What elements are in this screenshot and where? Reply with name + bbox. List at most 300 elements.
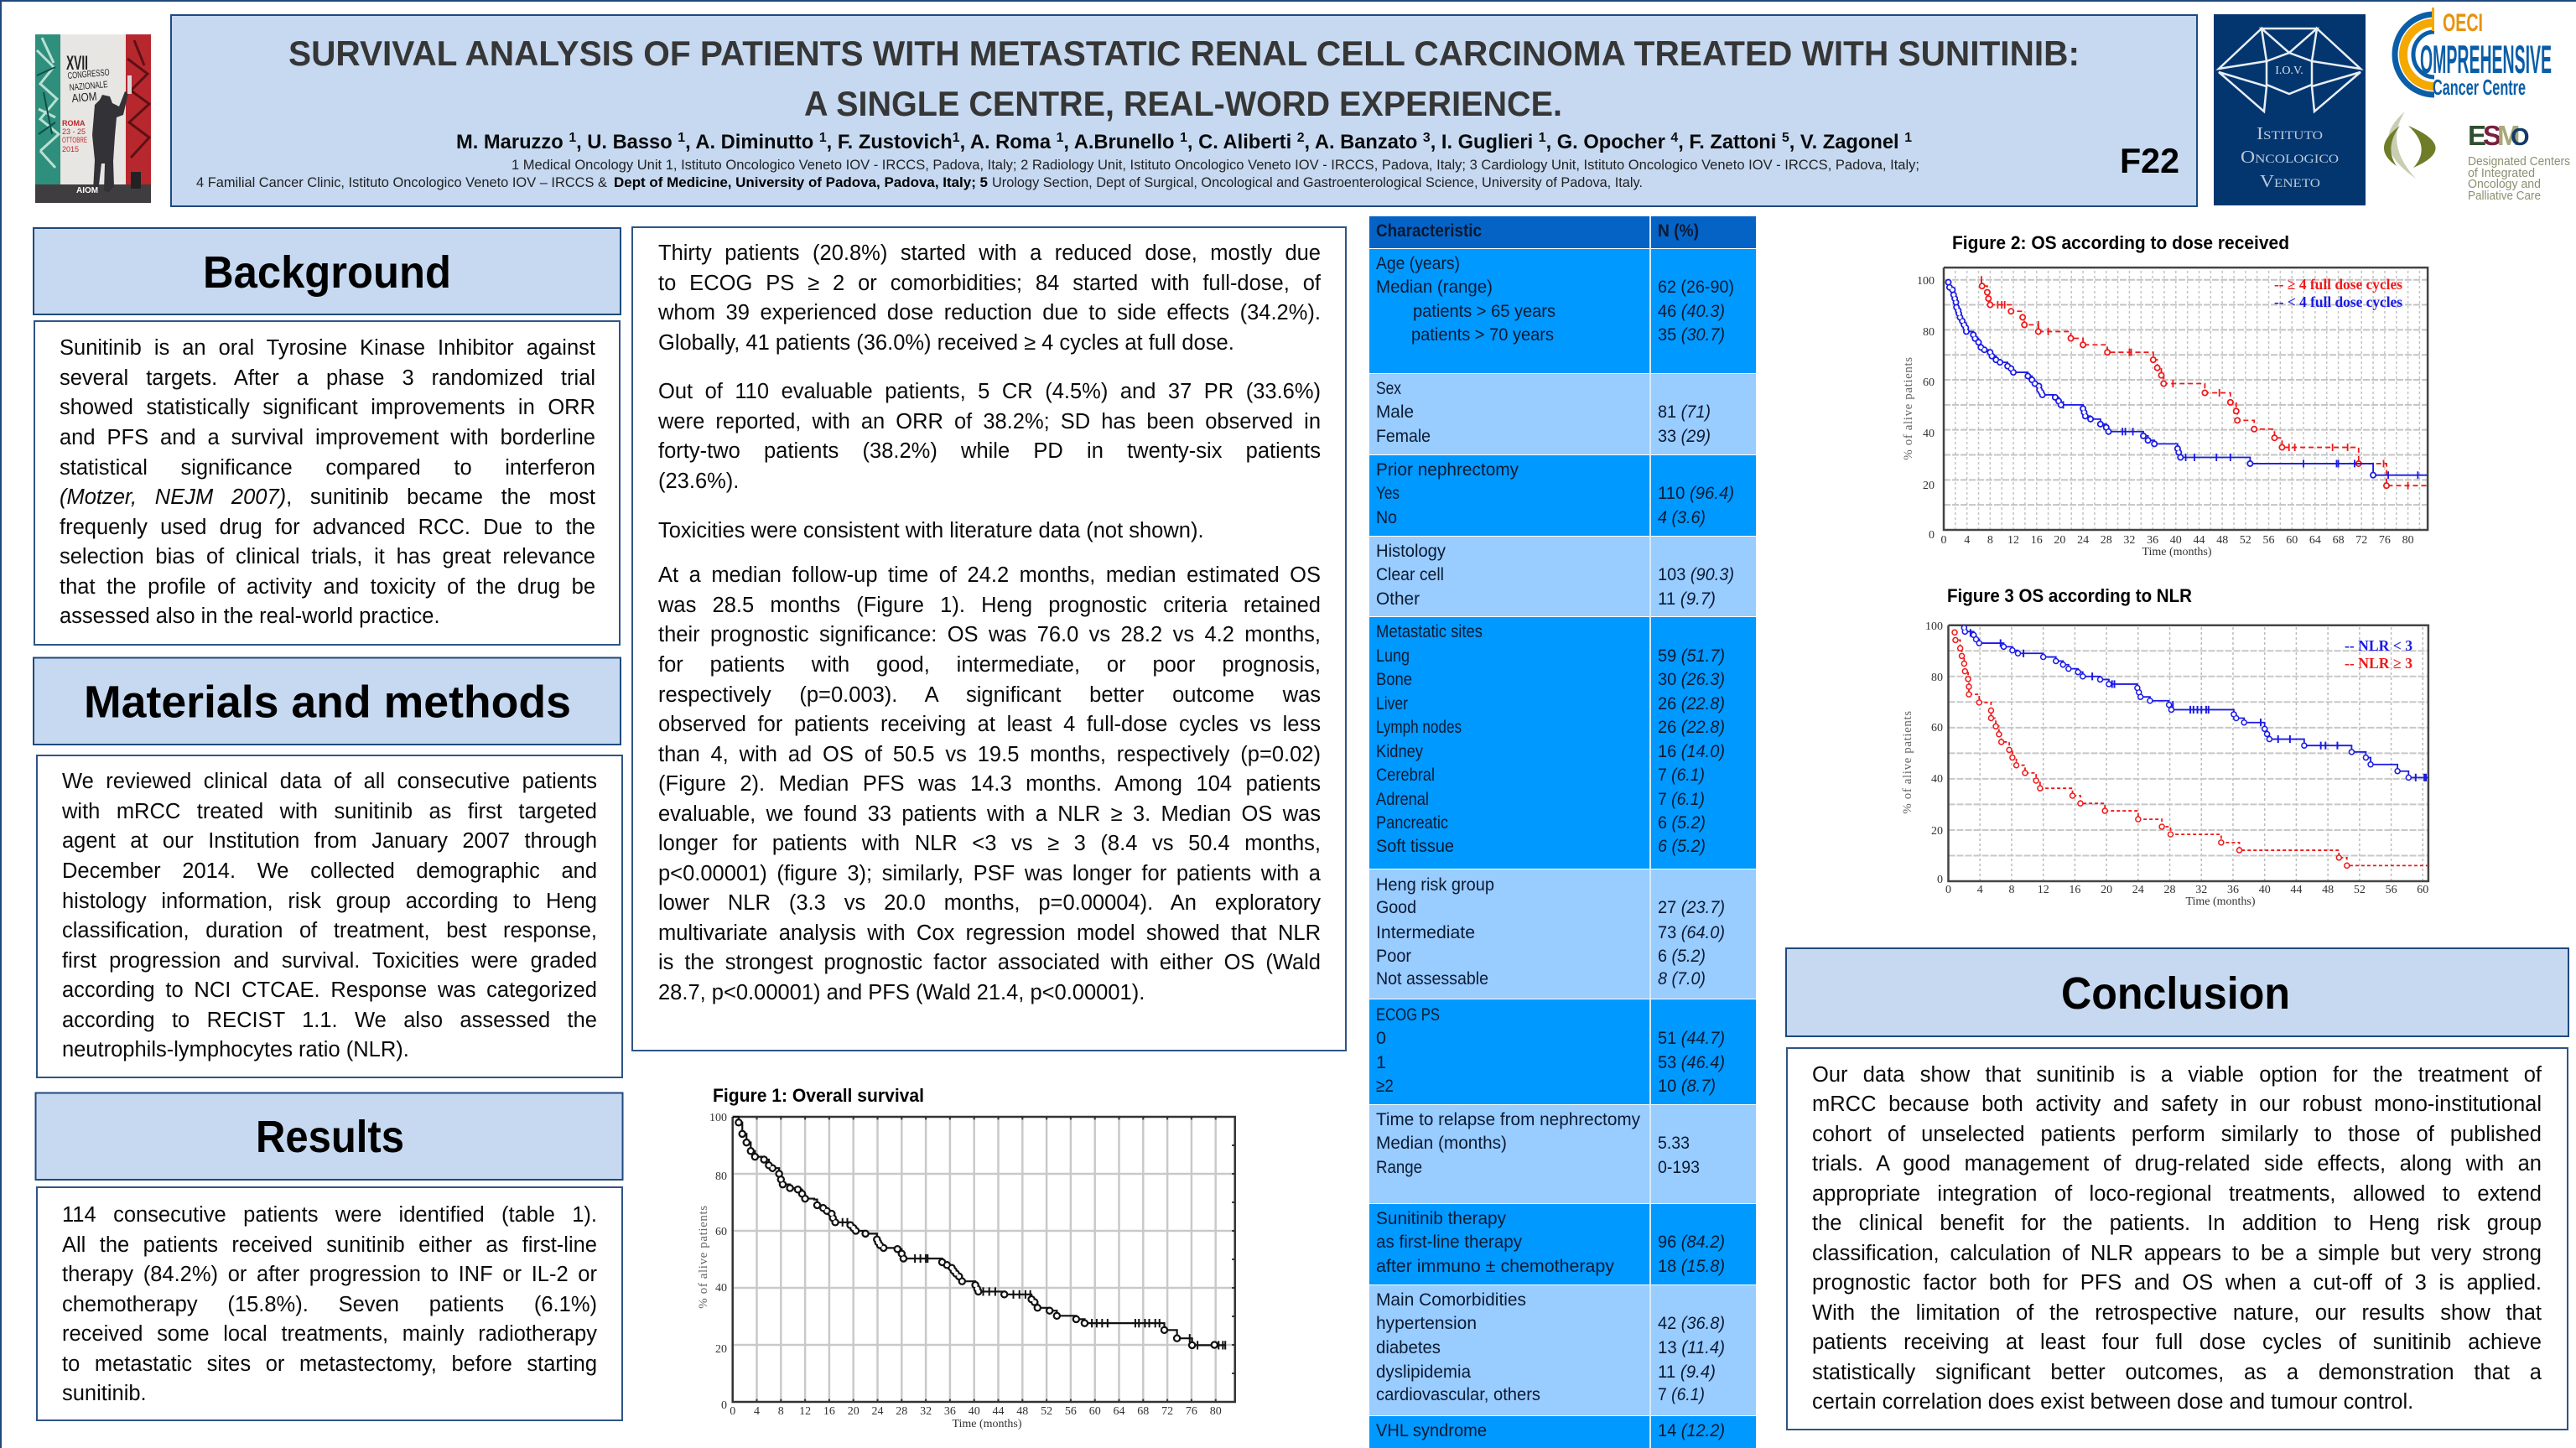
- row: metastatic sites: Lung: [1376, 646, 1410, 666]
- y axis labels: 80: [715, 1170, 727, 1183]
- row: histology: 11 (9.7): [1658, 589, 1716, 609]
- x axis labels: 24: [872, 1405, 884, 1418]
- row: time to relapse: Median (months): [1376, 1133, 1507, 1153]
- x axis labels: 56: [1065, 1405, 1077, 1418]
- row: main comorbidities: cardiovascular, others: [1376, 1384, 1540, 1404]
- affiliations line 1: 1 Medical Oncology Unit 1, Istituto Oncologico Veneto IOV - IRCCS, Padova, Italy; 2 Radiology Unit, Istituto Oncologico Veneto IOV - IRCCS, Padova, Italy; 3 Cardiology Unit, Istituto Oncologico Veneto IOV - IRCCS, Padova, Italy;: [512, 157, 1919, 173]
- panel: materials and methods text: classification, duration of treatment, best response,: [62, 919, 597, 942]
- panel: conclusion text: appropriate integration of loco-regional treatments, allowed to extend: [1812, 1182, 2542, 1206]
- row: sex: Sex: [1376, 378, 1401, 398]
- panel: conclusion text: mRCC because both activity and safety in our robust mono-institutional: [1812, 1092, 2542, 1116]
- paragraph: survival: observed for patients receiving at least 4 full-dose cycles vs less: [658, 713, 1321, 736]
- row: time to relapse: Time to relapse from nephrectomy: [1376, 1109, 1640, 1129]
- x axis labels: 44: [2290, 884, 2302, 896]
- row: ECOG PS: 51 (44.7): [1658, 1028, 1725, 1048]
- blue event markers: [1949, 283, 2373, 475]
- row: Heng risk group: Poor: [1376, 946, 1411, 966]
- legend: -- < 4 full dose cycles: [2274, 293, 2402, 310]
- x axis labels: 80: [2402, 534, 2414, 547]
- x axis labels: 48: [2322, 884, 2334, 896]
- row: metastatic sites: Lymph nodes: [1376, 717, 1462, 737]
- panel: conclusion text: With the limitation of the retrospective nature, our results show that: [1812, 1301, 2542, 1325]
- row: metastatic sites: 26 (22.8): [1658, 717, 1725, 737]
- x axis labels: 12: [2007, 534, 2019, 547]
- row: ECOG PS: 0: [1376, 1028, 1386, 1048]
- row: sex: Female: [1376, 426, 1431, 446]
- x axis labels: 16: [823, 1405, 835, 1418]
- row: histology: [1376, 541, 1734, 609]
- logo: Istituto Oncologico Veneto: Veneto: [2260, 171, 2320, 191]
- x axis labels: [1945, 884, 2428, 896]
- row: main comorbidities: dyslipidemia: [1376, 1362, 1471, 1382]
- row: Heng risk group: 73 (64.0): [1658, 922, 1725, 942]
- congress poster image: ROMA: [62, 119, 86, 127]
- row: prior nephrectomy: 4 (3.6): [1658, 507, 1706, 527]
- x axis labels: 4: [1977, 884, 1983, 896]
- x axis labels: 68: [2333, 534, 2345, 547]
- y axis title: % of alive patients: [697, 1205, 710, 1309]
- logo: ESMO designated centers: Palliative Care: [2468, 189, 2541, 203]
- panel: background text: and PFS and a survival improvement with borderline: [60, 426, 595, 449]
- x axis labels: 0: [730, 1405, 735, 1418]
- row: metastatic sites: Metastatic sites: [1376, 621, 1483, 641]
- logo: Istituto Oncologico Veneto: I.O.V.: [2275, 65, 2303, 77]
- row: ECOG PS: 53 (46.4): [1658, 1052, 1725, 1072]
- x axis labels: 72: [2355, 534, 2367, 547]
- panel: conclusion text: the clinical benefit for the patients. In addition to Heng risk group: [1812, 1212, 2542, 1235]
- y axis labels: 60: [1923, 376, 1935, 389]
- affiliations line 2: Dept of Medicine, University of Padova, Padova, Italy; 5: [614, 174, 988, 190]
- paragraph: survival: their prognostic significance: OS was 76.0 vs 28.2 vs 4.2 months,: [658, 623, 1321, 646]
- blue curve: fewer than 4 full dose cycles: [1949, 283, 2428, 475]
- row: time to relapse: 5.33: [1658, 1133, 1690, 1153]
- row: prior nephrectomy: No: [1376, 507, 1397, 527]
- x axis labels: 40: [2170, 534, 2182, 547]
- heading: Conclusion: Conclusion: [2061, 968, 2290, 1019]
- y axis labels: 40: [715, 1282, 727, 1295]
- paragraph: survival: multivariate analysis with Cox regression model showed that NLR: [658, 921, 1321, 945]
- affiliations line 2: Urology Section, Dept of Surgical, Oncological and Gastroenterological Science, University of Padova, Italy.: [992, 174, 1643, 190]
- logo: ESMO designated centers: O: [2511, 124, 2530, 151]
- figure 3 title: Figure 3 OS according to NLR: [1947, 585, 2192, 606]
- x axis labels: 20: [848, 1405, 860, 1418]
- panel: conclusion text: prognostic factor both for PFS and OS when a cut-off of 3 is applied.: [1812, 1271, 2542, 1295]
- x axis labels: 60: [1089, 1405, 1101, 1418]
- row: metastatic sites: 26 (22.8): [1658, 693, 1725, 714]
- logo: OECI Comprehensive Cancer Centre: OECI: [2443, 9, 2483, 37]
- x axis labels: 52: [2240, 534, 2251, 547]
- panel: materials and methods text: neutrophils-lymphocytes ratio (NLR).: [62, 1038, 409, 1061]
- row: Heng risk group: Good: [1376, 897, 1416, 917]
- panel: conclusion text: certain correlation does exist between dose and tumour control.: [1812, 1390, 2413, 1414]
- y axis labels: 0: [1929, 529, 1935, 542]
- paragraph: survival: [658, 563, 1321, 1004]
- x axis labels: 4: [1964, 534, 1970, 547]
- x axis labels: 24: [2132, 884, 2144, 896]
- y axis labels: [1925, 620, 1943, 886]
- y axis labels: 60: [1931, 722, 1943, 734]
- panel: results text: [35, 1186, 622, 1421]
- congress poster image: AIOM: [76, 186, 98, 195]
- row: metastatic sites: [1376, 621, 1725, 856]
- y axis labels: 20: [715, 1343, 727, 1356]
- blue curve: NLR below 3: [1964, 628, 2428, 777]
- authors: M. Maruzzo 1, U. Basso 1, A. Diminutto 1, F. Zustovich1, A. Roma 1, A.Brunello 1, C. Aliberti 2, A. Banzato 3, I. Guglieri 1, G. Opocher 4, F. Zattoni 5, V. Zagonel 1: [456, 131, 1912, 153]
- logo: ESMO designated centers: Oncology and: [2468, 177, 2541, 191]
- legend: -- NLR ≥ 3: [2345, 655, 2412, 672]
- paragraph: dose: Thirty patients (20.8%) started with a reduced dose, mostly due: [658, 241, 1321, 265]
- panel: materials and methods text: histology information, risk group according to Heng: [62, 890, 597, 913]
- row: metastatic sites: 6 (5.2): [1658, 836, 1706, 856]
- y axis labels: 100: [1925, 620, 1943, 633]
- paragraph: response: were reported, with an ORR of 38.2%; SD has been observed in: [658, 410, 1321, 433]
- y axis labels: 80: [1923, 326, 1935, 339]
- congress poster image: AIOM: [71, 89, 97, 105]
- x axis labels: 0: [1945, 884, 1951, 896]
- logo: Istituto Oncologico Veneto: Istituto: [2257, 123, 2323, 143]
- x axis labels: 0: [1940, 534, 1947, 547]
- y axis labels: 0: [721, 1399, 727, 1412]
- row: age: 35 (30.7): [1658, 324, 1725, 345]
- x axis labels: 36: [2147, 534, 2158, 547]
- paragraph: survival: was 28.5 months (Figure 1). Heng prognostic criteria retained: [658, 594, 1321, 617]
- poster code F22: F22: [2120, 141, 2179, 180]
- x axis labels: 64: [2309, 534, 2321, 547]
- heading: Results: Results: [256, 1112, 404, 1162]
- row: sunitinib therapy: Sunitinib therapy: [1376, 1208, 1506, 1228]
- panel: materials and methods text: December 2014. We collected demographic and: [62, 859, 597, 883]
- x axis labels: 52: [2354, 884, 2366, 896]
- paragraph: dose: to ECOG PS ≥ 2 or comorbidities; 84 started with full-dose, of: [658, 272, 1321, 295]
- y axis labels: [709, 1112, 727, 1412]
- panel: results continued: [631, 226, 1347, 1051]
- heading: Background: Background: [203, 247, 451, 298]
- table header: Characteristic: [1376, 221, 1482, 241]
- congress poster image: NAZIONALE: [69, 80, 108, 93]
- row: age: patients > 65 years: [1413, 301, 1555, 321]
- row: main comorbidities: diabetes: [1376, 1337, 1441, 1357]
- blue censor ticks: [2064, 401, 2418, 479]
- paragraph: dose: Globally, 41 patients (36.0%) received ≥ 4 cycles at full dose.: [658, 331, 1234, 355]
- censor ticks: [843, 1218, 1225, 1349]
- congress poster image: 2015: [62, 145, 79, 153]
- row: sunitinib therapy: as first-line therapy: [1376, 1232, 1522, 1252]
- row: Heng risk group: 8 (7.0): [1658, 968, 1706, 989]
- paragraph: dose: whom 39 experienced dose reduction due to side effects (34.2%).: [658, 301, 1321, 324]
- paragraph: survival: At a median follow-up time of 24.2 months, median estimated OS: [658, 563, 1321, 587]
- x axis title: Time (months): [2142, 546, 2212, 558]
- y axis labels: 20: [1923, 480, 1935, 492]
- x axis labels: 12: [2038, 884, 2049, 896]
- paragraph: response: (23.6%).: [658, 470, 739, 493]
- row: time to relapse: [1376, 1109, 1700, 1177]
- x axis labels: 80: [1210, 1405, 1222, 1418]
- row: metastatic sites: 59 (51.7): [1658, 646, 1725, 666]
- y axis labels: 100: [709, 1112, 727, 1124]
- row: sunitinib therapy: 18 (15.8): [1658, 1256, 1725, 1276]
- paragraph: survival: than 4, with ad OS of 50.5 vs 19.5 months, respectively (p=0.02): [658, 743, 1321, 766]
- row: histology: Clear cell: [1376, 564, 1444, 584]
- row: histology: Other: [1376, 589, 1420, 609]
- panel: background text: [34, 320, 621, 646]
- title banner: [170, 14, 2198, 207]
- x axis labels: 20: [2054, 534, 2065, 547]
- panel: materials and methods text: [35, 755, 622, 1078]
- row: prior nephrectomy: 110 (96.4): [1658, 483, 1734, 503]
- y axis labels: 40: [1923, 428, 1935, 440]
- row: Heng risk group: [1376, 875, 1725, 989]
- row: sunitinib therapy: 96 (84.2): [1658, 1232, 1725, 1252]
- row: sex: 81 (71): [1658, 402, 1711, 422]
- x axis labels: 40: [2259, 884, 2271, 896]
- row: Heng risk group: Intermediate: [1376, 922, 1475, 942]
- title line 1: SURVIVAL ANALYSIS OF PATIENTS WITH METASTATIC RENAL CELL CARCINOMA TREATED WITH SUNITINIB:: [288, 34, 2080, 73]
- panel: background text: several targets. After a phase 3 randomized trial: [60, 366, 595, 390]
- blue event markers: [1964, 628, 2408, 777]
- panel: results text: 114 consecutive patients were identified (table 1).: [62, 1203, 597, 1227]
- row: age: patients > 70 years: [1411, 324, 1554, 345]
- panel: materials and methods text: with mRCC treated with sunitinib as first targeted: [62, 800, 597, 823]
- row: main comorbidities: 7 (6.1): [1658, 1384, 1705, 1404]
- row: main comorbidities: 11 (9.4): [1658, 1362, 1716, 1382]
- row: Heng risk group: Heng risk group: [1376, 875, 1494, 895]
- panel: results text: sunitinib.: [62, 1382, 147, 1405]
- row: age: Median (range): [1376, 277, 1493, 297]
- row: histology: Histology: [1376, 541, 1446, 561]
- row: metastatic sites: Soft tissue: [1376, 836, 1454, 856]
- affiliations line 2: [196, 174, 1643, 190]
- y axis labels: [1917, 275, 1935, 542]
- x axis labels: 72: [1161, 1405, 1173, 1418]
- row: age: [1376, 253, 1734, 345]
- x axis labels: 16: [2069, 884, 2080, 896]
- table header: N (%): [1658, 221, 1699, 241]
- panel: background text: Sunitinib is an oral Tyrosine Kinase Inhibitor against: [60, 336, 595, 360]
- paragraph: survival: 28.7, p<0.00001) and PFS (Wald 21.4, p<0.00001).: [658, 981, 1145, 1004]
- x axis labels: 44: [993, 1405, 1005, 1418]
- row: metastatic sites: Bone: [1376, 669, 1412, 689]
- row: metastatic sites: Liver: [1376, 693, 1408, 714]
- logo: ESMO designated centers: M: [2497, 120, 2521, 151]
- row: VHL syndrome: 14 (12.2): [1658, 1420, 1725, 1440]
- page border left: [0, 0, 2, 1448]
- heading: Background: [33, 227, 621, 315]
- title line 2: A SINGLE CENTRE, REAL-WORD EXPERIENCE.: [804, 84, 1562, 123]
- panel: background text: assessed also in the real-world practice.: [60, 605, 440, 628]
- row: time to relapse: Range: [1376, 1157, 1422, 1177]
- y axis title: % of alive patients: [1901, 710, 1914, 814]
- x axis title: Time (months): [952, 1418, 1022, 1430]
- x axis labels: 36: [944, 1405, 956, 1418]
- heading: Materials and methods: [33, 657, 621, 745]
- red curve: at least 4 full dose cycles: [1981, 280, 2428, 485]
- chart: figure 2 OS according to dose received: [1902, 232, 2428, 558]
- row: ECOG PS: ECOG PS: [1376, 1004, 1440, 1025]
- panel: materials and methods text: agent at our Institution from January 2007 through: [62, 829, 597, 853]
- panel: conclusion text: trials. A good management of drug-related side effects, along with an: [1812, 1152, 2542, 1176]
- row: main comorbidities: 13 (11.4): [1658, 1337, 1725, 1357]
- x axis labels: 28: [2101, 534, 2112, 547]
- heading: Conclusion: [1785, 947, 2569, 1037]
- x axis labels: 56: [2262, 534, 2274, 547]
- logo: ESMO designated centers: E: [2468, 120, 2486, 151]
- x axis labels: 8: [778, 1405, 784, 1418]
- x axis labels: [730, 1405, 1222, 1418]
- row: time to relapse: 0-193: [1658, 1157, 1700, 1177]
- panel: materials and methods text: according to RECIST 1.1. We also assessed the: [62, 1009, 597, 1032]
- row: main comorbidities: Main Comorbidities: [1376, 1290, 1526, 1310]
- legend: [2345, 637, 2412, 672]
- row bands: [1369, 216, 1756, 1448]
- paragraph: response: Out of 110 evaluable patients, 5 CR (4.5%) and 37 PR (33.6%): [658, 380, 1321, 403]
- row: main comorbidities: [1376, 1290, 1725, 1404]
- x axis labels: 16: [2031, 534, 2043, 547]
- x axis labels: 32: [2123, 534, 2135, 547]
- event markers: [739, 1123, 1214, 1345]
- x axis labels: 36: [2227, 884, 2239, 896]
- row: sex: [1376, 378, 1711, 446]
- x axis labels: 28: [896, 1405, 907, 1418]
- logo: ESMO designated centers: S: [2483, 120, 2501, 151]
- row: VHL syndrome: VHL syndrome: [1376, 1420, 1487, 1440]
- x axis labels: 68: [1137, 1405, 1149, 1418]
- row: ECOG PS: 1: [1376, 1052, 1386, 1072]
- row: Heng risk group: Not assessable: [1376, 968, 1488, 989]
- logo: ESMO designated centers: Designated Centers: [2468, 154, 2570, 169]
- panel: conclusion text: cohort of unselected patients perform similarly to those of published: [1812, 1123, 2542, 1146]
- y axis title: % of alive patients: [1902, 356, 1915, 460]
- figure 1 title: Figure 1: Overall survival: [713, 1085, 924, 1106]
- x axis labels: 40: [969, 1405, 980, 1418]
- logo: Istituto Oncologico Veneto: [2214, 14, 2366, 205]
- logo: Istituto Oncologico Veneto: Oncologico: [2241, 147, 2339, 167]
- x axis labels: 44: [2194, 534, 2205, 547]
- figure 2 title: Figure 2: OS according to dose received: [1952, 232, 2289, 253]
- table: patient characteristics: [1369, 216, 1756, 1448]
- panel: materials and methods text: according to NCI CTCAE. Response was categorized: [62, 978, 597, 1002]
- panel: materials and methods text: first progression and survival. Toxicities were graded: [62, 949, 597, 973]
- row: metastatic sites: Cerebral: [1376, 765, 1435, 785]
- congress poster image: XVII: [66, 52, 88, 75]
- paragraph: survival: evaluable, we found 33 patients with a NLR ≥ 3. Median OS was: [658, 802, 1321, 826]
- panel: results text: therapy (84.2%) or after progression to INF or IL-2 or: [62, 1263, 597, 1286]
- panel: background text: selection bias of clinical trials, it has great relevance: [60, 545, 595, 568]
- y axis labels: 100: [1917, 275, 1935, 288]
- survival curve: [733, 1117, 1224, 1345]
- row: Heng risk group: 6 (5.2): [1658, 946, 1706, 966]
- paragraph: survival: (Figure 2). Median PFS was 14.3 months. Among 104 patients: [658, 772, 1321, 796]
- y axis labels: 20: [1931, 825, 1943, 838]
- panel: background text: that the profile of activity and toxicity of the drug be: [60, 575, 595, 599]
- y axis labels: 80: [1931, 672, 1943, 684]
- row: ECOG PS: ≥2: [1376, 1076, 1394, 1096]
- x axis labels: [1940, 534, 2414, 547]
- congress poster image: [35, 34, 151, 203]
- red event markers: [1955, 632, 2347, 865]
- row: age: Age (years): [1376, 253, 1460, 273]
- red curve: NLR at least 3: [1955, 632, 2428, 865]
- x axis labels: 32: [2195, 884, 2207, 896]
- x axis labels: 48: [2216, 534, 2228, 547]
- table header: [1376, 221, 1699, 241]
- x axis labels: 24: [2077, 534, 2089, 547]
- panel: conclusion text: statistically significant better outcomes, as a demonstration that a: [1812, 1361, 2542, 1384]
- panel: conclusion text: Our data show that sunitinib is a viable option for the treatment of: [1812, 1063, 2542, 1087]
- paragraph: toxicities: Toxicities were consistent with literature data (not shown).: [658, 519, 1204, 542]
- row: prior nephrectomy: Prior nephrectomy: [1376, 459, 1519, 480]
- paragraph: response: forty-two patients (38.2%) while PD in twenty-six patients: [658, 439, 1321, 463]
- x axis labels: 60: [2417, 884, 2428, 896]
- row: sunitinib therapy: after immuno ± chemotherapy: [1376, 1256, 1614, 1276]
- row: Heng risk group: 27 (23.7): [1658, 897, 1725, 917]
- heading: Materials and methods: Materials and methods: [84, 677, 571, 728]
- row: sex: 33 (29): [1658, 426, 1711, 446]
- panel: background text: (Motzer, NEJM 2007), sunitinib became the most: [60, 485, 595, 509]
- paragraph: survival: longer for patients with NLR <3 vs ≥ 3 (8.4 vs 50.4 months,: [658, 832, 1321, 855]
- panel: results text: All the patients received sunitinib either as first-line: [62, 1233, 597, 1257]
- paragraph: survival: p<0.00001) (figure 3); similarly, PSF was longer for patients with a: [658, 862, 1321, 885]
- page border top: [0, 0, 2576, 2]
- row: main comorbidities: hypertension: [1376, 1313, 1477, 1333]
- congress poster image: CONGRESSO: [67, 68, 110, 81]
- row: histology: 103 (90.3): [1658, 564, 1734, 584]
- row: main comorbidities: 42 (36.8): [1658, 1313, 1725, 1333]
- chart: figure 1 overall survival: [697, 1085, 1236, 1430]
- row: metastatic sites: 7 (6.1): [1658, 765, 1705, 785]
- chart: figure 3 OS according to NLR: [1901, 585, 2430, 908]
- logo: ESMO designated centers: of Integrated: [2468, 166, 2535, 180]
- x axis labels: 4: [754, 1405, 760, 1418]
- congress poster image: OTTOBRE: [62, 136, 87, 144]
- x axis labels: 20: [2101, 884, 2112, 896]
- row: metastatic sites: Adrenal: [1376, 789, 1429, 809]
- panel: results text: received some local treatments, mainly radiotherapy: [62, 1322, 597, 1346]
- row: metastatic sites: 16 (14.0): [1658, 741, 1725, 761]
- paragraph: survival: respectively (p=0.003). A significant better outcome was: [658, 683, 1321, 707]
- paragraph: response: [658, 380, 1321, 493]
- legend: [2274, 276, 2402, 310]
- affiliations line 2: 4 Familial Cancer Clinic, Istituto Oncologico Veneto IOV – IRCCS &: [196, 174, 608, 190]
- x axis labels: 28: [2163, 884, 2175, 896]
- congress poster image: 23 - 25: [62, 127, 86, 136]
- panel: results text: chemotherapy (15.8%). Seven patients (6.1%): [62, 1293, 597, 1316]
- heading: Results: [35, 1092, 624, 1181]
- legend: -- NLR < 3: [2345, 637, 2412, 654]
- row: metastatic sites: Pancreatic: [1376, 812, 1448, 833]
- row: age: 62 (26-90): [1658, 277, 1734, 297]
- x axis labels: 76: [2379, 534, 2391, 547]
- panel: conclusion text: classification, calculation of NLR appears to be a simple but very strong: [1812, 1242, 2542, 1265]
- panel: materials and methods text: We reviewed clinical data of all consecutive patients: [62, 770, 597, 793]
- panel: conclusion text: patients receiving at least four full dose cycles of sunitinib achieve: [1812, 1331, 2542, 1354]
- x axis labels: 76: [1186, 1405, 1197, 1418]
- y axis labels: 60: [715, 1226, 727, 1238]
- x axis labels: 48: [1016, 1405, 1028, 1418]
- row: ECOG PS: [1376, 1004, 1725, 1096]
- row: age: 46 (40.3): [1658, 301, 1725, 321]
- row: metastatic sites: 7 (6.1): [1658, 789, 1705, 809]
- paragraph: survival: lower NLR (3.3 vs 20.0 months, p=0.00004). An exploratory: [658, 891, 1321, 915]
- y axis labels: 40: [1931, 773, 1943, 786]
- x axis labels: 60: [2286, 534, 2298, 547]
- x axis labels: 52: [1041, 1405, 1052, 1418]
- row: metastatic sites: 30 (26.3): [1658, 669, 1725, 689]
- paragraph: survival: for patients with good, intermediate, or poor prognosis,: [658, 653, 1321, 677]
- paragraph: dose: [658, 241, 1321, 355]
- x axis labels: 12: [799, 1405, 811, 1418]
- row: VHL syndrome: [1376, 1420, 1725, 1440]
- red event markers: [1982, 286, 2386, 485]
